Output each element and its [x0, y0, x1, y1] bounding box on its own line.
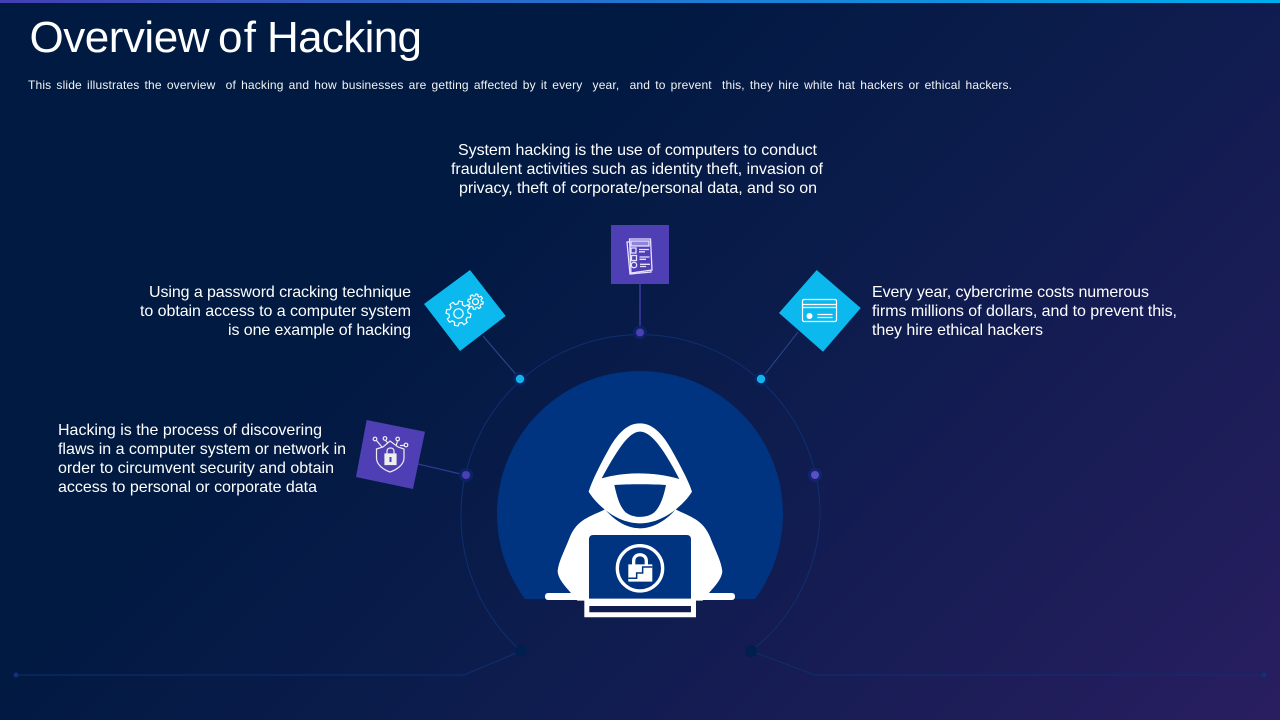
text block: definition of hacking: flaws in a computer system or network in	[58, 441, 346, 458]
laptop screen	[589, 535, 691, 599]
icon: shield lock square	[356, 420, 425, 489]
connector: gears	[483, 336, 519, 378]
title: Overview	[30, 13, 210, 62]
connector: card	[762, 332, 798, 378]
icon: gears diamond	[424, 270, 506, 351]
node: far left	[14, 672, 18, 678]
title	[30, 13, 422, 62]
text block: system hacking: privacy, theft of corporate/personal data, and so on	[459, 180, 817, 197]
text block: cybercrime costs: Every year, cybercrime costs numerous	[872, 284, 1149, 301]
table bar	[545, 593, 735, 600]
text block: cybercrime costs	[872, 284, 1177, 339]
text block: cybercrime costs: firms millions of dollars, and to prevent this,	[872, 303, 1177, 320]
node: upper right	[754, 372, 768, 386]
node: bottom left	[515, 645, 527, 657]
lock body with stairs	[628, 564, 652, 582]
text block: cybercrime costs: they hire ethical hackers	[872, 322, 1043, 339]
hood opening	[602, 432, 679, 479]
text block: system hacking	[451, 142, 824, 197]
icon: credit card diamond	[779, 270, 861, 352]
text block: definition of hacking: Hacking is the process of discovering	[58, 422, 322, 439]
lock shackle	[634, 555, 646, 565]
node: right	[808, 468, 822, 482]
icon: document checklist	[611, 225, 669, 284]
text block: system hacking: fraudulent activities such as identity theft, invasion of	[451, 161, 824, 178]
face	[614, 484, 666, 517]
node: far right	[1262, 672, 1266, 678]
central disc	[497, 371, 783, 599]
laptop base	[584, 599, 696, 617]
node: upper left	[513, 372, 527, 386]
text block: password cracking	[140, 284, 411, 339]
text block: password cracking: is one example of hacking	[228, 322, 411, 339]
text block: definition of hacking: order to circumvent security and obtain	[58, 460, 334, 477]
hood	[589, 423, 692, 523]
text block: password cracking: Using a password cracking technique	[149, 284, 411, 301]
icon: hooded hacker with laptop	[545, 423, 735, 617]
subtitle text: This slide illustrates the overview of hacking and how businesses are getting affected by it every year, and to prevent this, they hire white hat hackers or ethical hackers.	[28, 78, 1012, 92]
circuit arc and base lines	[16, 335, 1265, 675]
hacker body	[558, 509, 722, 601]
lock badge	[617, 546, 663, 591]
node: top	[633, 326, 647, 340]
title: Hacking	[267, 13, 422, 62]
text block: definition of hacking: access to personal or corporate data	[58, 479, 317, 496]
title: of	[218, 13, 257, 62]
connector: top document	[639, 284, 641, 331]
node: bottom right	[745, 645, 757, 657]
node: left	[459, 468, 473, 482]
text block: system hacking: System hacking is the use of computers to conduct	[458, 142, 818, 159]
text block: definition of hacking	[58, 422, 346, 496]
connector: shield	[418, 464, 465, 475]
text block: password cracking: to obtain access to a computer system	[140, 303, 411, 320]
